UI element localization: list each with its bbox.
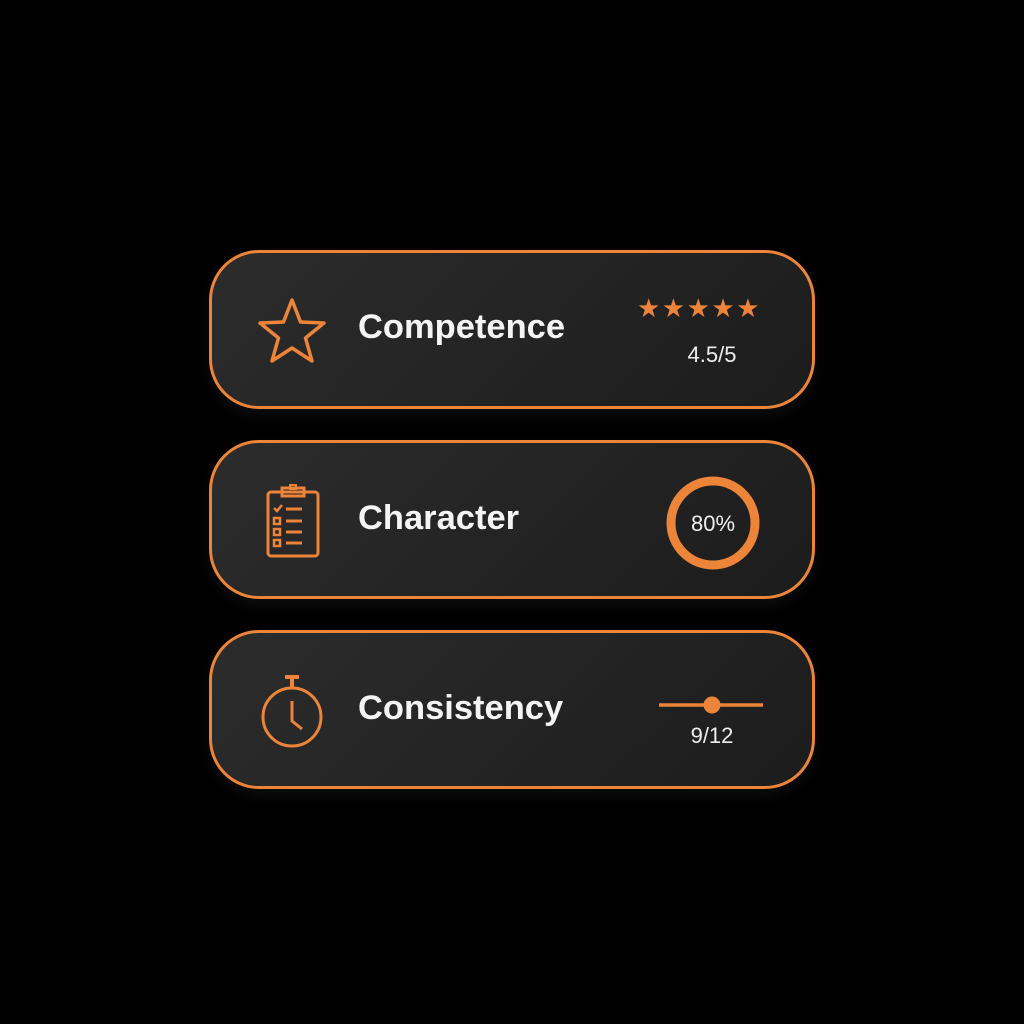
value: 4.5/5: 4.5/5 (688, 342, 736, 367)
heading: competence: Competence (358, 308, 565, 346)
card: competence (209, 250, 815, 409)
rating stars: ★★★★★ (637, 293, 761, 323)
ring: 80% (666, 476, 760, 570)
slider (659, 696, 763, 714)
icon: clipboard (266, 484, 320, 558)
ring: 80%: 80% (691, 511, 735, 536)
heading: character: Character (358, 499, 519, 537)
value: 9/12: 9/12 (691, 723, 733, 748)
card: consistency (209, 630, 815, 789)
icon: stopwatch (262, 675, 322, 748)
card: character (209, 440, 815, 599)
heading: consistency: Consistency (358, 689, 563, 727)
icon: star (258, 298, 326, 363)
